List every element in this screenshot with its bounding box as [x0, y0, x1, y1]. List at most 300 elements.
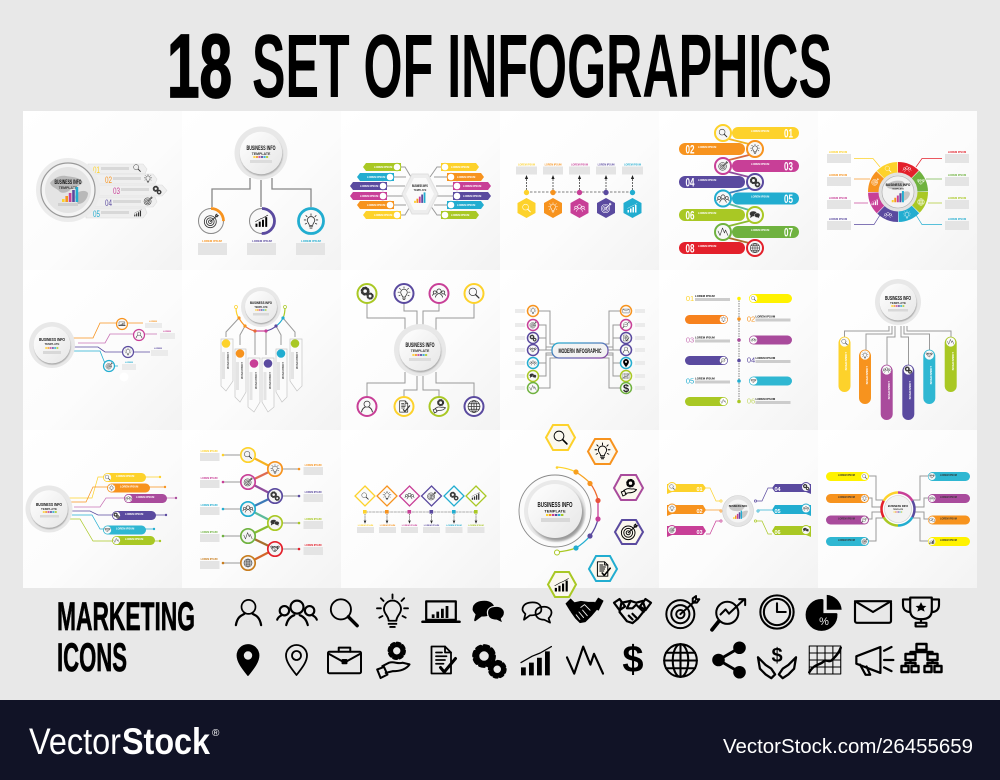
pill labels: LOREM IPSUM: [940, 496, 957, 499]
dashed timeline: [526, 191, 632, 193]
ribbon numbers: 04: [105, 198, 112, 208]
captions: LOREM IPSUM: [545, 164, 561, 166]
icon: hand gear: [377, 643, 410, 678]
icon: filled chat: [474, 602, 504, 623]
tag circles: [222, 339, 299, 368]
pill circles: [861, 473, 936, 545]
hexagon hub: [402, 174, 438, 214]
ring icons: [529, 307, 629, 390]
ribbon text lines: [101, 167, 149, 214]
panel: hexagon arc hub: [500, 425, 659, 597]
bar labels: LOREM IPSUM: [698, 178, 716, 182]
lead dots: [222, 454, 300, 564]
right tags: LOREM IPSUM: [457, 203, 475, 207]
captions: LOREM IPSUM: [201, 558, 217, 561]
numbers: 02: [747, 314, 755, 324]
branch circles: [104, 318, 144, 372]
bar labels: [698, 129, 769, 248]
body captions: LOREM IPSUM: [756, 314, 776, 318]
captions: LOREM IPSUM: [402, 525, 417, 527]
hub ring: [875, 486, 921, 532]
panel: radial donut: [818, 111, 977, 270]
captions: [202, 239, 322, 243]
arc dots: [554, 466, 601, 555]
right tags: LOREM IPSUM: [451, 165, 469, 169]
captions: LOREM IPSUM: [948, 150, 966, 154]
central pill: MODERN INFOGRAPHIC: [558, 349, 602, 355]
captions: [829, 150, 966, 221]
right tags: LOREM IPSUM: [457, 175, 475, 179]
hub: [29, 322, 75, 368]
body captions: LOREM IPSUM: [756, 397, 776, 401]
captions: LOREM IPSUM: [380, 525, 395, 527]
icon: target: [666, 596, 699, 628]
axis dots: [737, 297, 741, 403]
icon: document: [432, 646, 456, 674]
panel: circle arrows: [23, 111, 182, 270]
left tags: LOREM IPSUM: [360, 184, 378, 188]
hub: TEMPLATE: [411, 349, 430, 353]
timeline dots: [524, 190, 635, 195]
icon: pie chart: %: [819, 616, 829, 628]
hub ring: BUSINESS INFO: [888, 504, 908, 508]
icon: megaphone: [856, 647, 893, 675]
connectors: [706, 488, 772, 534]
captions: LOREM IPSUM: [202, 239, 223, 243]
icon: group: [277, 601, 317, 625]
hub: BUSINESS INFO: [538, 502, 573, 509]
donut segment icons: [872, 166, 925, 218]
logo: VectorStock: Vector: [29, 721, 121, 762]
donut hub: BUSINESS INFO: [886, 183, 911, 187]
connectors: [212, 178, 311, 207]
pill labels: LOREM IPSUM: [838, 496, 855, 499]
timeline dots: [363, 510, 478, 514]
capsule labels: [844, 352, 955, 399]
captions: LOREM IPSUM: [948, 217, 966, 221]
ribbon circles: [668, 482, 810, 534]
step numbers: 05: [784, 194, 793, 206]
step numbers: 08: [686, 243, 695, 255]
panel: diamond timeline: [341, 430, 500, 588]
panel: molecule zigzag: [182, 430, 341, 588]
ribbon numbers: [93, 165, 120, 219]
bar labels: LOREM IPSUM: [751, 228, 769, 232]
captions: LOREM IPSUM: [624, 164, 641, 166]
ribbon numbers: 03: [113, 186, 120, 196]
ribbon numbers: 02: [696, 509, 703, 515]
body captions: LOREM IPSUM: [695, 376, 715, 380]
icon: hands dollar: [758, 645, 796, 678]
bar labels: LOREM IPSUM: [698, 211, 716, 215]
pill labels: LOREM IPSUM: [125, 537, 143, 541]
ribbon numbers: 01: [93, 165, 100, 175]
dashed axis: [738, 298, 740, 402]
ribbon rows: [86, 164, 167, 218]
left tags: LOREM IPSUM: [360, 194, 378, 198]
diamonds: [355, 486, 486, 506]
numbers: [686, 294, 755, 406]
numbers: 06: [747, 396, 755, 406]
body captions: LOREM IPSUM: [756, 356, 776, 360]
panel: branching lines: [23, 270, 182, 430]
leader lines: [854, 158, 942, 224]
pill labels: LOREM IPSUM: [120, 484, 138, 488]
icon: briefcase: [328, 648, 361, 673]
text blocks: [827, 154, 969, 230]
tag text: LOREM IPSUM: [268, 372, 271, 389]
hexagons: [518, 198, 642, 218]
right tags: LOREM IPSUM: [463, 194, 481, 198]
arc dots: [234, 306, 286, 333]
ribbon numbers: 03: [696, 530, 703, 536]
panel: hanging tags: [182, 270, 341, 430]
timeline bar: [365, 511, 476, 513]
pill circles: [104, 474, 132, 544]
connector dots: [720, 500, 759, 522]
donut segments: [863, 157, 933, 227]
hub: TEMPLATE: [45, 342, 60, 346]
globe hub: BUSINESS INFO: [54, 180, 82, 186]
caption text blocks: [198, 243, 325, 255]
icon: person: [236, 600, 261, 625]
rings: [241, 448, 282, 570]
icon: globe: [664, 644, 697, 677]
ribbon numbers: 02: [105, 175, 112, 185]
captions: LOREM IPSUM: [829, 173, 847, 177]
panel: right-side capsule hub: [659, 430, 818, 588]
pill labels: LOREM IPSUM: [940, 539, 957, 542]
hub: [241, 287, 281, 327]
panel: vertical capsules: [818, 270, 977, 430]
bars: [679, 127, 799, 254]
captions: LOREM IPSUM: [829, 150, 847, 154]
captions: LOREM IPSUM: [571, 164, 588, 166]
captions: [358, 525, 484, 527]
captions: LOREM IPSUM: [305, 518, 321, 521]
pill labels: LOREM IPSUM: [838, 539, 855, 542]
captions: LOREM IPSUM: [358, 525, 373, 527]
ribbon icons: [669, 484, 809, 533]
panel: hexagon hub with twelve tags: [341, 111, 500, 270]
captions: LOREM IPSUM: [252, 239, 273, 243]
heading: marketing icons: MARKETING: [57, 595, 195, 639]
icon: search: [331, 599, 357, 626]
ring 3 bulb: [298, 208, 324, 234]
tag text: [226, 352, 298, 389]
connectors: [226, 318, 295, 355]
footer url: VectorStock.com/26455659: [723, 736, 973, 758]
arc segments: [557, 467, 598, 552]
body captions: LOREM IPSUM: [695, 294, 715, 298]
icon: share: [713, 642, 745, 678]
captions: LOREM IPSUM: [201, 477, 217, 480]
icon set: marketing row two: [238, 639, 942, 681]
left tags: LOREM IPSUM: [367, 203, 385, 207]
timeline arrows: [365, 514, 476, 522]
step numbers: [686, 128, 793, 255]
hub: BUSINESS INFO: [250, 300, 272, 305]
tag text blocks: [222, 352, 294, 400]
hub: BUSINESS INFO: [39, 337, 65, 342]
pill labels: LOREM IPSUM: [940, 518, 957, 520]
step numbers: 06: [686, 210, 694, 222]
icon: rising bars: [521, 647, 551, 675]
hexagon hub: TEMPLATE: [414, 189, 427, 192]
ring icons: [361, 287, 480, 413]
hub: [519, 475, 591, 547]
logo: VectorStock: [29, 721, 220, 762]
panel: hub with eight rings: [341, 270, 500, 430]
capsule labels: LOREM IPSUM: [844, 352, 848, 370]
captions: LOREM IPSUM: [305, 464, 321, 467]
captions: LOREM IPSUM: [829, 196, 847, 200]
icon: trophy: [903, 598, 939, 626]
pill labels: [116, 474, 154, 541]
capsule icons: [842, 339, 954, 373]
bar labels: LOREM IPSUM: [698, 244, 716, 248]
globe hub: TEMPLATE: [59, 186, 78, 190]
ribbon numbers: [696, 487, 781, 536]
heading: marketing icons: ICONS: [57, 636, 127, 680]
rings: [528, 306, 632, 394]
vertical arrows: [526, 177, 632, 190]
capsule labels: LOREM IPSUM: [951, 352, 955, 370]
captions: LOREM IPSUM: [301, 239, 322, 243]
ring 2 bars: [250, 208, 274, 234]
pill labels: LOREM IPSUM: [838, 474, 855, 477]
branch labels: LOREM: [154, 348, 162, 350]
ribbon numbers: 04: [774, 487, 781, 493]
globe hub: [36, 158, 100, 222]
captions: LOREM IPSUM: [948, 196, 966, 200]
right tags: LOREM IPSUM: [451, 213, 469, 217]
dollar sign: $: [623, 383, 629, 395]
icon: bulb: [377, 594, 408, 627]
left tags: LOREM IPSUM: [374, 213, 392, 217]
pill labels: LOREM IPSUM: [125, 512, 143, 516]
logo: VectorStock: ®: [212, 728, 220, 739]
hub: [875, 279, 921, 325]
colored links: [248, 455, 275, 563]
branch labels: LOREM: [163, 331, 171, 333]
pills: [685, 294, 792, 406]
hub: BUSINESS INFO: [36, 502, 62, 507]
text blocks: [200, 453, 323, 569]
connectors: [367, 303, 474, 396]
captions: LOREM IPSUM: [598, 164, 614, 166]
title: 18: [167, 17, 232, 117]
step numbers: 01: [784, 128, 793, 140]
thin branches: [65, 477, 176, 541]
captions: [518, 164, 641, 166]
footer band: [0, 700, 1000, 780]
pill labels: LOREM IPSUM: [116, 526, 134, 530]
hub: TEMPLATE: [890, 301, 906, 305]
icon: gears: [474, 646, 505, 677]
pill labels: LOREM IPSUM: [116, 474, 134, 478]
donut hub: TEMPLATE: [892, 188, 904, 190]
hub: [394, 324, 446, 376]
tag text: LOREM IPSUM: [295, 352, 298, 369]
icon: filled handshake: [566, 598, 603, 623]
icon: org chart: [902, 644, 942, 672]
hexagon icons: [523, 203, 637, 213]
step numbers: 02: [686, 144, 694, 156]
icon: growth search: [712, 599, 745, 630]
branch labels: [122, 321, 175, 370]
tag outlines: [221, 339, 302, 412]
tag text: LOREM IPSUM: [281, 362, 284, 379]
connectors: [844, 326, 951, 365]
icon: filled pin: [238, 645, 258, 675]
panel: modern infographic: [500, 270, 659, 430]
connectors: [868, 476, 928, 541]
captions: LOREM IPSUM: [518, 164, 535, 166]
ribbon icons: [134, 165, 161, 216]
branch icons: [106, 322, 142, 369]
bar labels: LOREM IPSUM: [751, 129, 769, 133]
captions: LOREM IPSUM: [305, 491, 321, 494]
panel: hexagon timeline: [500, 111, 659, 270]
icon: pie chart: [807, 595, 842, 630]
hexagon icons: [554, 431, 637, 591]
ribbons: [667, 484, 811, 537]
icon: dollar: $: [622, 639, 644, 681]
tag text: LOREM IPSUM: [254, 372, 257, 389]
icon: laptop: [422, 601, 460, 622]
bar labels: LOREM IPSUM: [751, 194, 769, 198]
left tags: LOREM IPSUM: [367, 175, 385, 179]
pill labels: LOREM IPSUM: [940, 474, 957, 477]
captions: LOREM IPSUM: [829, 217, 847, 221]
panel: hub with pills and thin lines: [23, 430, 182, 588]
heading: marketing icons: [57, 595, 195, 680]
ribbon numbers: 06: [774, 530, 781, 536]
pills: [826, 472, 970, 546]
hub: TEMPLATE: [41, 507, 57, 511]
hub ring: TEMPLATE: [893, 508, 904, 511]
hub: [25, 486, 72, 532]
lead lines: [223, 455, 299, 563]
colored branches: [70, 323, 157, 366]
step circles: [715, 125, 763, 256]
panel: three ring diagram: [182, 111, 341, 270]
step numbers: 04: [686, 177, 695, 189]
pill icons: [105, 475, 132, 542]
hub: [234, 126, 288, 180]
bar labels: LOREM IPSUM: [751, 162, 769, 166]
pill labels: LOREM IPSUM: [838, 518, 855, 520]
hub: TEMPLATE: [544, 508, 566, 514]
capsule labels: LOREM IPSUM: [929, 366, 933, 384]
pill icons: [721, 296, 756, 403]
right tags: LOREM IPSUM: [463, 184, 481, 188]
hub: BUSINESS INFO: [729, 505, 747, 508]
step numbers: 03: [784, 161, 793, 173]
left tags: LOREM IPSUM: [374, 165, 392, 169]
numbers: 04: [747, 356, 755, 364]
captions: LOREM IPSUM: [468, 525, 484, 527]
left tags: [350, 163, 401, 219]
white halo circle: [120, 372, 128, 382]
numbers: 01: [686, 294, 694, 303]
icon: outline handshake: [614, 599, 651, 623]
diamond icons: [362, 491, 480, 500]
donut hub: [878, 172, 918, 212]
caption text blocks: [516, 166, 643, 174]
icon set: marketing row one: [236, 594, 939, 630]
icon: zigzag: [567, 647, 603, 674]
text blocks: [357, 527, 484, 533]
capsule tops: [840, 337, 956, 375]
hub: BUSINESS INFO: [246, 146, 276, 152]
capsules: [838, 337, 957, 420]
captions: LOREM IPSUM: [446, 525, 462, 527]
icon: outline chat: [522, 602, 552, 623]
captions: LOREM IPSUM: [201, 504, 217, 507]
tag text: LOREM IPSUM: [226, 352, 229, 369]
captions: LOREM IPSUM: [305, 544, 321, 547]
capsule labels: LOREM IPSUM: [865, 366, 869, 384]
ribbon numbers: 01: [696, 487, 703, 493]
panel: eight step snake: [659, 111, 818, 270]
icon: clock: [760, 595, 794, 629]
pill icons: [862, 474, 935, 544]
branch labels: LOREM: [149, 321, 157, 323]
hub: TEMPLATE: [252, 152, 271, 156]
side labels: [515, 309, 645, 390]
pill labels: LOREM IPSUM: [136, 495, 154, 499]
central pill: [552, 343, 608, 358]
captions: LOREM IPSUM: [948, 173, 966, 177]
icon: outline pin: [286, 645, 307, 675]
connectors: [387, 167, 453, 215]
branch labels: LOREM: [125, 362, 133, 364]
hub: BUSINESS INFO: [406, 343, 435, 349]
logo: VectorStock: Stock: [122, 721, 210, 762]
pill labels: [838, 474, 957, 542]
body captions: LOREM IPSUM: [695, 336, 715, 340]
numbers: 05: [686, 376, 694, 386]
right tags: [441, 163, 491, 219]
step icons: [717, 129, 760, 253]
pills: [103, 473, 167, 545]
capsule labels: LOREM IPSUM: [887, 381, 891, 399]
icon: line chart: [809, 646, 841, 674]
body captions: [695, 294, 776, 401]
hub: [722, 496, 754, 526]
ribbon numbers: 05: [774, 509, 781, 515]
captions: [201, 450, 321, 561]
ring icons: [243, 451, 280, 567]
captions: LOREM IPSUM: [201, 450, 217, 453]
hub: BUSINESS INFO: [885, 296, 911, 302]
numbers: 03: [686, 336, 694, 344]
captions: LOREM IPSUM: [201, 531, 217, 534]
title: [167, 17, 832, 117]
icon: mail: [855, 601, 891, 623]
icon: hands dollar: $: [771, 645, 783, 667]
snake connectors: [729, 139, 749, 243]
connectors: [539, 311, 620, 388]
hexagon hub: BUSINESS INFO: [412, 184, 428, 188]
panel: vertical dashed timeline: [659, 270, 818, 430]
hexagons: [546, 425, 643, 597]
step numbers: 07: [784, 227, 793, 239]
panel: colored ring with side pills: [818, 430, 977, 588]
ribbon numbers: 05: [93, 209, 100, 219]
